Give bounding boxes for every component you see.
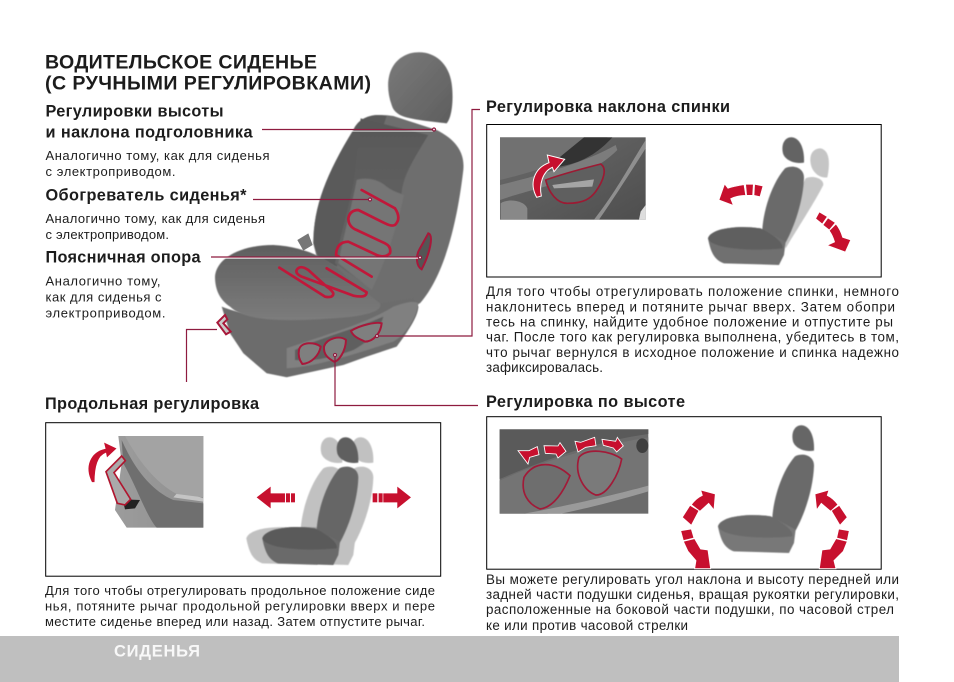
seat knobs [217,233,431,364]
text: longitudinal adjustment description: нья, потяните рычаг продольной регулировки вверх и пере [45,598,435,614]
text: lumbar support: электроприводом. [46,306,166,320]
text: headrest adjustment: Аналогично тому, как для сиденья [46,148,270,163]
main seat illustration [215,52,464,377]
panel: longitudinal adjustment [46,423,441,576]
text: lumbar support: как для сиденья с [46,290,162,304]
callout lines [186,110,480,406]
text: longitudinal adjustment description: Для того чтобы отрегулировать продольное положение сиде [45,583,435,598]
heading: backrest tilt: Регулировка наклона спинки [486,98,730,116]
text: headrest adjustment: Регулировки высоты [46,102,224,120]
title: (С РУЧНЫМИ РЕГУЛИРОВКАМИ) [45,72,371,94]
text: backrest tilt description: зафиксировалась. [486,360,603,375]
arrow: lift lever [533,155,565,197]
text: headrest adjustment [46,102,270,179]
seat [718,425,814,553]
arrows: rear height [815,490,849,569]
arrow: lift lever [88,442,117,483]
text: backrest tilt description: что рычаг вернулся в исходное положение и спинка надежно [486,345,899,360]
seat cushion [215,245,380,320]
lever photo [106,436,203,528]
panel: backrest tilt [487,124,881,277]
text: backrest tilt description: чаг. После того как регулировка выполнена, убедитесь в том, [486,330,899,344]
heading: longitudinal adjustment: Продольная регулировка [45,395,260,413]
panel: height adjustment [487,417,881,569]
text: backrest tilt description: Для того чтобы отрегулировать положение спинки, немного [486,284,899,299]
text: seat heater: Аналогично тому, как для сиденья [46,211,265,226]
text: height adjustment description [486,572,899,633]
text: height adjustment description: ке или против часовой стрелки [486,618,688,633]
lever photo [500,137,646,220]
text: seat heater: Обогреватель сиденья* [46,186,247,204]
text: lumbar support: Аналогично тому, [46,274,160,288]
footer band [0,636,899,682]
text: backrest tilt description [486,284,899,375]
headrest [388,52,453,123]
text: headrest adjustment: и наклона подголовника [46,124,253,142]
arrow: slide back [373,487,411,508]
text: height adjustment description: расположенные на боковой части подушки, по часовой стрел [486,602,894,617]
seat sliding ghosts [246,437,373,565]
arrow: slide forward [257,487,295,508]
side lever behind cushion [297,233,313,251]
text: seat heater: с электроприводом. [46,227,169,242]
seat reclined ghost [779,148,829,248]
backrest [313,115,464,309]
text: backrest tilt description: наклонитесь вперед и потяните рычаг вверх. Затем обопри [486,300,895,314]
arrow: tilt back [816,212,851,252]
text: height adjustment description: задней части подушки сиденья, вращая рукоятки регулировки, [486,587,899,602]
footer label: СИДЕНЬЯ [114,642,200,660]
title: ВОДИТЕЛЬСКОЕ СИДЕНЬЕ [45,52,317,74]
text: seat heater [46,186,265,242]
text: height adjustment description: Вы можете регулировать угол наклона и высоту передней или [486,572,899,587]
text: longitudinal adjustment description [45,583,435,629]
title [45,52,371,94]
heater element [279,190,398,297]
seat upright [708,137,804,265]
arrows: front height [681,490,715,569]
arrow: tilt forward [719,184,763,205]
text: longitudinal adjustment description: местите сиденье вперед или назад. Затем отпустите рычаг. [45,614,425,629]
seat base [222,298,418,377]
text: backrest tilt description: тесь на спинку, найдите удобное положение и отпустите ры [486,314,893,330]
text: headrest adjustment: с электроприводом. [46,164,176,179]
arrows: knob rotation [518,437,623,464]
text: lumbar support: Поясничная опора [46,248,201,266]
heading: height adjustment: Регулировка по высоте [486,393,685,411]
knobs photo [500,429,648,514]
text: lumbar support [46,248,201,320]
